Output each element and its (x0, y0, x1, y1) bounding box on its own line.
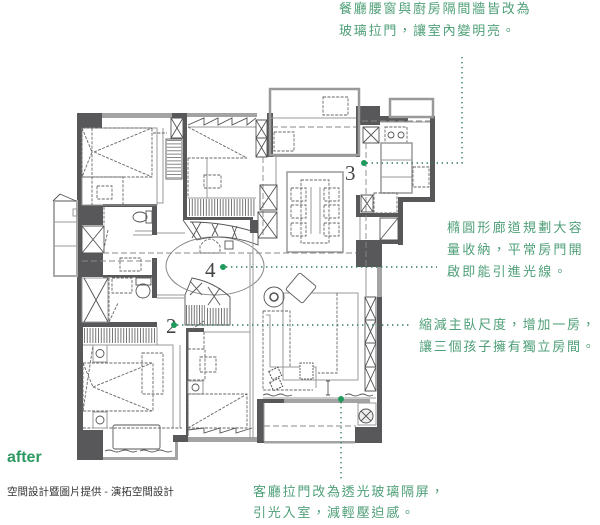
note: master bedroom: 縮減主臥尺度，增加一房， (419, 317, 597, 332)
kitchen (360, 121, 430, 267)
note: master bedroom (419, 317, 597, 354)
dining table and chairs (258, 172, 343, 252)
note: living room door (253, 484, 445, 520)
dotted leader: bedroom note (171, 322, 410, 328)
note: living room door: 客廳拉門改為透光玻璃隔屏， (253, 484, 445, 499)
note: kitchen glass door: 玻璃拉門，讓室內變明亮。 (339, 23, 517, 38)
dotted leader: living room note (338, 396, 344, 482)
room numbers: 3 (345, 161, 356, 185)
dotted leader: corridor note (220, 264, 437, 270)
NW bedroom furniture (82, 118, 183, 205)
living room furniture (263, 267, 376, 426)
note: elliptical corridor (447, 220, 584, 279)
room numbers (166, 161, 356, 338)
note: elliptical corridor: 量收納，平常房門開 (447, 242, 584, 257)
credit line: 空間設計暨圖片提供 - 演拓空間設計 (7, 486, 174, 498)
note: elliptical corridor: 啟即能引進光線。 (447, 264, 569, 279)
structural walls (77, 106, 435, 460)
dotted leader: kitchen note (361, 57, 462, 166)
room numbers: 2 (166, 314, 176, 338)
label: after: after (7, 449, 42, 466)
note: master bedroom: 讓三個孩子擁有獨立房間。 (419, 339, 597, 354)
balconies and window frames (53, 89, 433, 441)
SW bedroom furniture (83, 327, 182, 452)
north bedroom furniture (188, 118, 294, 238)
elliptical corridor with curved cabinets (157, 220, 264, 440)
SE bedroom furniture (188, 321, 252, 433)
note: elliptical corridor: 橢圓形廊道規劃大容 (447, 220, 584, 235)
note: kitchen glass door: 餐廳腰窗與廚房隔間牆皆改為 (339, 1, 531, 16)
room numbers: 4 (205, 258, 216, 282)
note: living room door: 引光入室，減輕壓迫感。 (253, 505, 416, 520)
note: kitchen glass door (339, 1, 531, 38)
west bathrooms (82, 207, 356, 322)
